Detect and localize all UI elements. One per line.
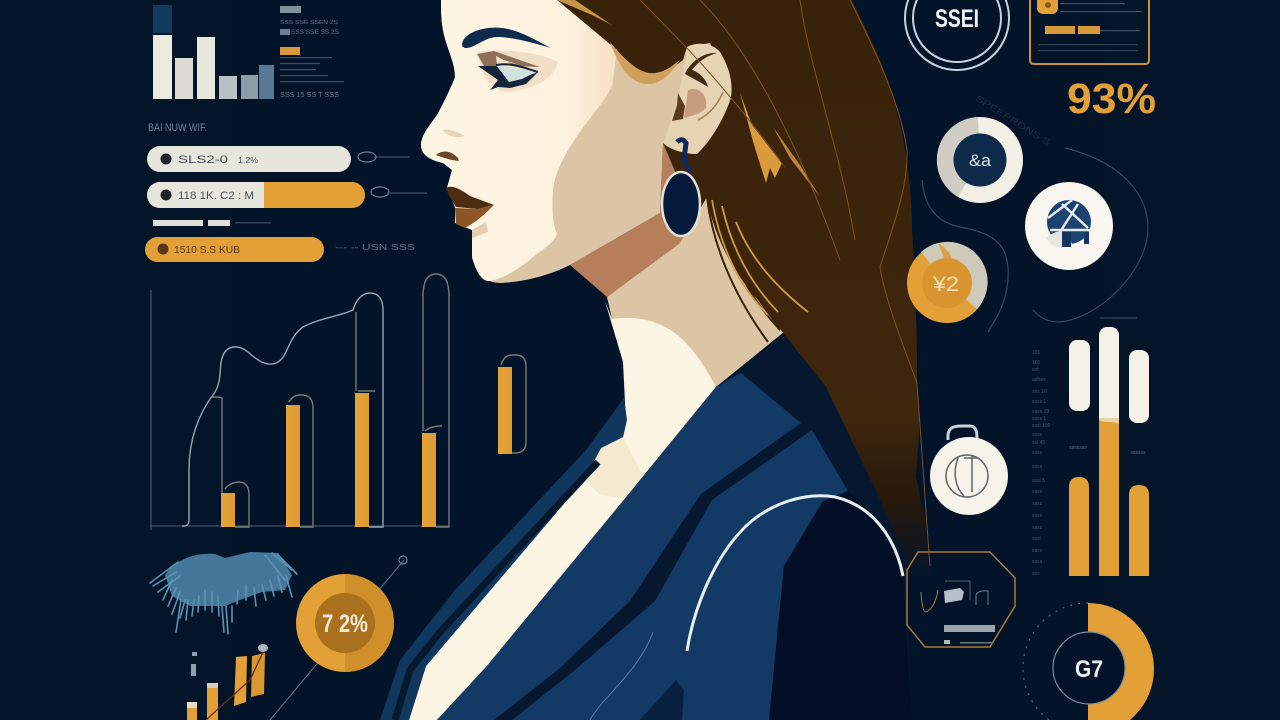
hair highlights (557, 0, 930, 566)
thin fold line (590, 632, 653, 720)
icon: navy donut: &a (969, 151, 992, 170)
label: G7 (1075, 656, 1103, 683)
scale labels: sass (1032, 548, 1043, 554)
bar capsule outlines (212, 274, 449, 527)
scale labels: ssl 45 (1032, 440, 1045, 446)
leader line (270, 556, 407, 720)
inner circle (1053, 632, 1125, 704)
neckline shadow (584, 437, 650, 498)
chart axes (151, 290, 448, 530)
pill 1: SLS2-0 (178, 154, 228, 166)
frame (907, 552, 1015, 647)
badge rings (905, 0, 1009, 70)
pill 1: 1.2% (238, 156, 258, 165)
faded diagonal label: SPEEPRONS S (974, 93, 1052, 147)
scale labels: sssa (1032, 464, 1042, 470)
orange bars (1069, 420, 1149, 576)
white bars (1069, 327, 1149, 427)
panel: top-left bar chart (153, 5, 344, 99)
donut 72 percent: 7 2% (322, 610, 368, 638)
badge text: SSEI (935, 5, 979, 33)
chart legend (280, 6, 344, 99)
connector curves (922, 148, 1148, 332)
pill 2: 118 1K. C2 : M (178, 190, 254, 202)
chest (409, 301, 716, 720)
bar chart columns (153, 5, 274, 99)
scale labels: sass (1032, 489, 1043, 495)
eyebrow (462, 28, 551, 48)
hair (555, 0, 932, 575)
dotted half ring (1023, 603, 1088, 720)
panel: progress pills (145, 146, 427, 262)
nose highlight shade (442, 130, 465, 137)
bar labels: sssssss (1069, 445, 1087, 451)
nose shadow (436, 152, 459, 161)
fold shadow (640, 680, 684, 720)
scale labels: sass (1032, 525, 1043, 531)
pill 3 label: --- -- USN SSS (335, 243, 415, 252)
lips (446, 187, 494, 228)
small bars (153, 220, 271, 226)
jacket dark base (437, 334, 912, 720)
box swatch (1037, 0, 1058, 14)
chart legend: SSS 15 SS T SSS (280, 92, 339, 99)
pill 2 (147, 182, 365, 208)
icon: gold donut (907, 242, 988, 323)
ear (663, 44, 732, 154)
trend line (182, 293, 383, 527)
icon: globe house (1025, 182, 1113, 270)
pill 3 (145, 237, 324, 262)
stat: 93 percent: 93% (1067, 75, 1156, 123)
scale labels: sos (1032, 571, 1040, 577)
chin shade (472, 222, 488, 238)
pill 3: 1510 S.S KUB (174, 245, 240, 256)
scale labels: sssl (1032, 536, 1041, 542)
panel: bottom-left graphics (150, 552, 407, 720)
eye socket shade (478, 50, 558, 92)
panel: orange legend box (1030, 0, 1149, 64)
panel: octagon device frame (907, 552, 1015, 647)
bar labels: ssssss (1130, 450, 1146, 456)
scale labels: ssss 1 (1032, 399, 1046, 405)
icon: navy donut (937, 117, 1023, 203)
face and shaded cheek (421, 0, 730, 283)
figure: woman in profile (380, 0, 932, 720)
scale labels: ssss (1032, 450, 1042, 456)
panel: line and bar chart (151, 274, 526, 530)
mini orange bars (187, 644, 268, 720)
jacket panel (512, 430, 848, 720)
jacket (437, 334, 912, 720)
standalone bar (498, 355, 526, 454)
icon: gold donut: ¥2 (932, 273, 959, 296)
scale labels: sof (1032, 367, 1039, 373)
device icon (921, 581, 995, 644)
scale labels: 101 (1032, 350, 1041, 356)
earring (662, 140, 700, 236)
bar tops (1099, 418, 1119, 424)
scale labels: ssss 1 (1032, 416, 1046, 422)
scale labels: adhes (1032, 377, 1046, 383)
neck shadow band (570, 143, 700, 297)
panel: G7 donut (1023, 603, 1154, 720)
scale labels: ssss (1032, 513, 1042, 519)
scale labels: sssl 100 (1032, 423, 1051, 429)
scale labels: sos 10 (1032, 389, 1047, 395)
dark right panel (769, 491, 912, 720)
orange bars (221, 393, 436, 527)
scale labels: ssss (1032, 432, 1042, 438)
lapel (437, 373, 801, 720)
donut 72 percent (296, 574, 394, 672)
scale labels: 101 (1032, 360, 1041, 366)
scale labels: sssa (1032, 559, 1042, 565)
chart legend: SSS SSE SS 2S (291, 30, 339, 36)
chart legend: SSS SSE SSEN 2S (280, 20, 339, 26)
pill 1 leader (358, 152, 410, 162)
box lines (1038, 3, 1142, 51)
scale labels: sass (1032, 501, 1043, 507)
pill 1 (147, 146, 351, 172)
neck (607, 197, 784, 387)
panel: SSEI badge (905, 0, 1009, 70)
orange half ring (1088, 603, 1154, 720)
bar labels (1069, 445, 1146, 456)
pill 2 leader (371, 187, 427, 197)
eye (477, 51, 540, 90)
box frame (1030, 0, 1149, 64)
section heading: BAI NUW WIF. (148, 122, 207, 134)
icon: white globe badge (930, 426, 1008, 515)
scale labels: sssl 5 (1032, 478, 1045, 484)
scale labels: sass 10 (1032, 409, 1049, 415)
left sleeve strip (380, 398, 627, 720)
feather fringe graphic (150, 552, 297, 634)
white shoulder arc (687, 496, 903, 651)
panel: vertical bars with scale (1032, 327, 1149, 577)
